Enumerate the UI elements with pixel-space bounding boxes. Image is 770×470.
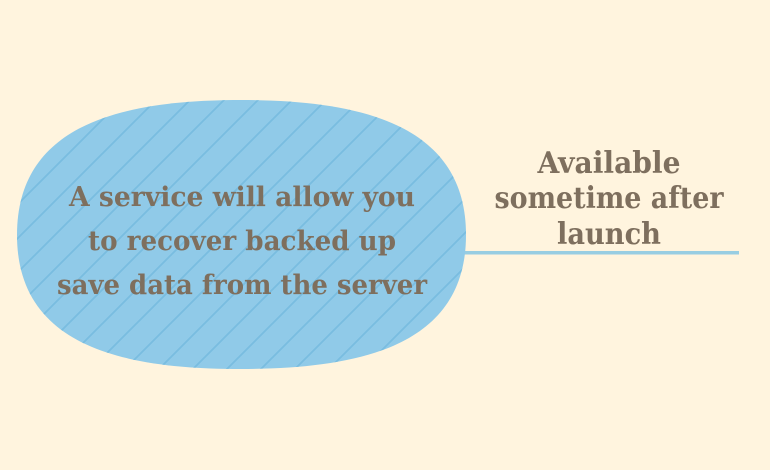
blue blob panel [17,100,466,369]
availability label: launch [557,217,661,252]
blob description text: to recover backed up [88,226,396,257]
blob description text [57,182,428,301]
availability label: sometime after [494,181,725,216]
availability label [494,146,725,252]
blob description text: save data from the server [57,270,428,301]
connector line [464,251,739,254]
blob description text: A service will allow you [68,182,415,213]
availability label: Available [537,146,680,181]
